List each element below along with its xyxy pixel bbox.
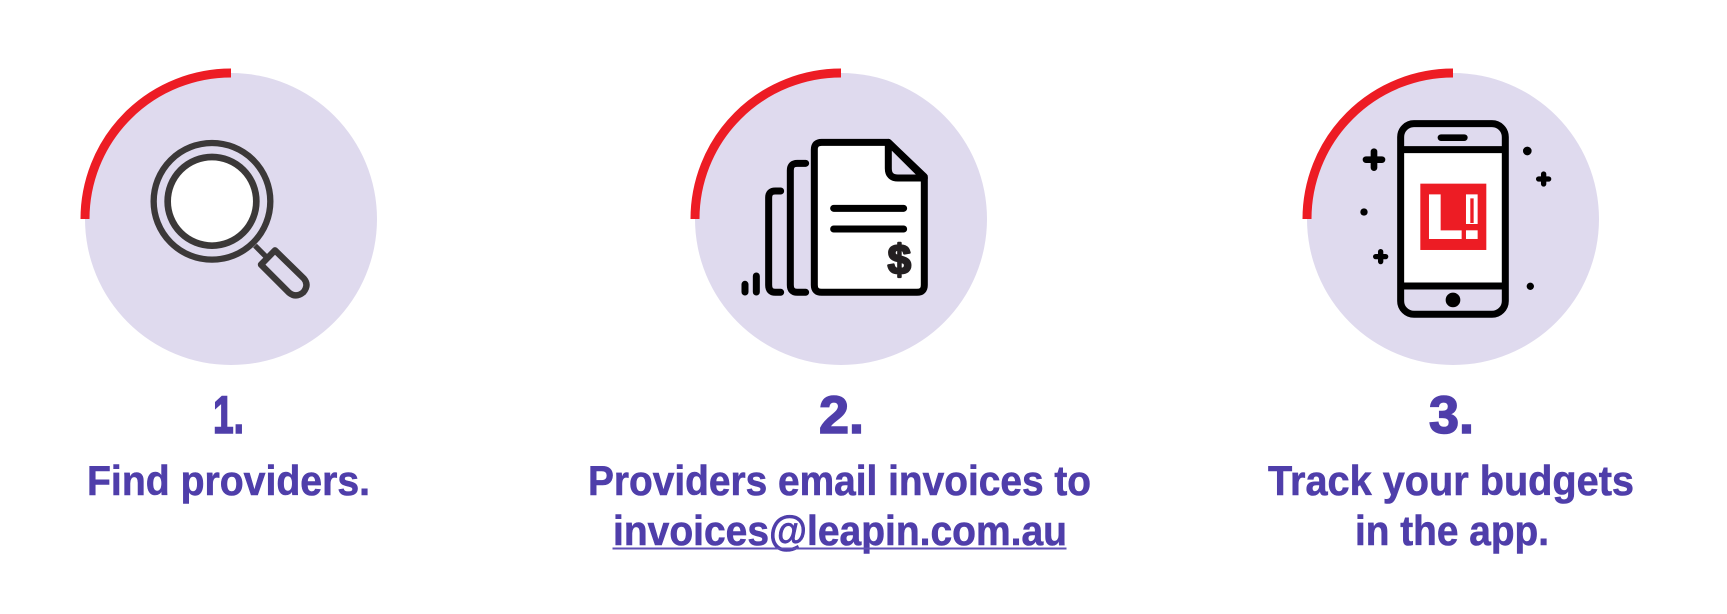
icon: invoice documents: $	[888, 236, 911, 283]
step number 3: 3.	[1429, 386, 1474, 445]
step text: providers email invoices: Providers email invoices to	[588, 457, 1091, 504]
step number 2: 2.	[819, 386, 864, 445]
step text: track budgets line 2: in the app.	[1355, 507, 1549, 554]
icon: phone with app logo	[1360, 124, 1549, 314]
step number 1: 1.	[213, 386, 244, 445]
icon: invoice documents	[745, 142, 924, 292]
step text: track budgets line 1: Track your budgets	[1268, 457, 1634, 504]
icon: magnifying glass	[154, 143, 306, 295]
red progress arc	[1307, 73, 1453, 219]
panel: step 1	[85, 73, 377, 504]
red progress arc	[85, 73, 231, 219]
email address link: invoices@leapin.com.au	[613, 507, 1067, 554]
background circle	[85, 73, 377, 365]
red progress arc	[695, 73, 841, 219]
panel: step 3	[1268, 73, 1634, 554]
background circle	[695, 73, 987, 365]
background circle	[1307, 73, 1599, 365]
step text: find providers: Find providers.	[87, 457, 370, 504]
panel: step 2	[588, 73, 1091, 554]
